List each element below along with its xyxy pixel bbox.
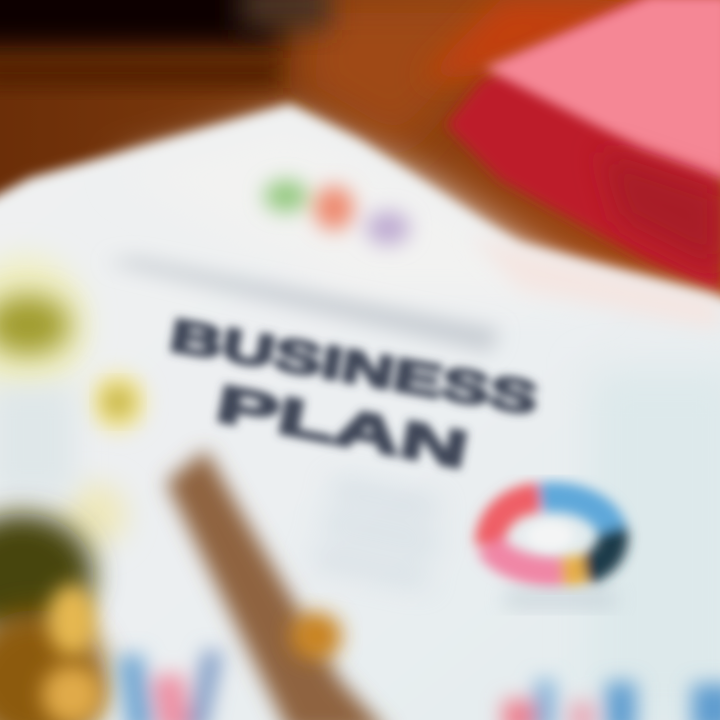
heading: business plan [166, 309, 542, 480]
donut chart [490, 497, 613, 572]
heading: business plan: PLAN [212, 375, 473, 480]
green plant and gold vase [0, 513, 107, 720]
flowers on the left [0, 255, 146, 547]
heading: business plan: BUSINESS [166, 309, 542, 424]
pen [166, 450, 390, 720]
faint donut caption [505, 590, 615, 608]
red book with pink cover [446, 0, 720, 292]
bar chart bottom left [117, 649, 222, 720]
small coloured logo dots [264, 180, 410, 245]
wooden table background [0, 0, 720, 320]
bar chart bottom right [503, 680, 720, 720]
faint body text block [309, 479, 440, 588]
faint subtitle line [105, 258, 500, 352]
